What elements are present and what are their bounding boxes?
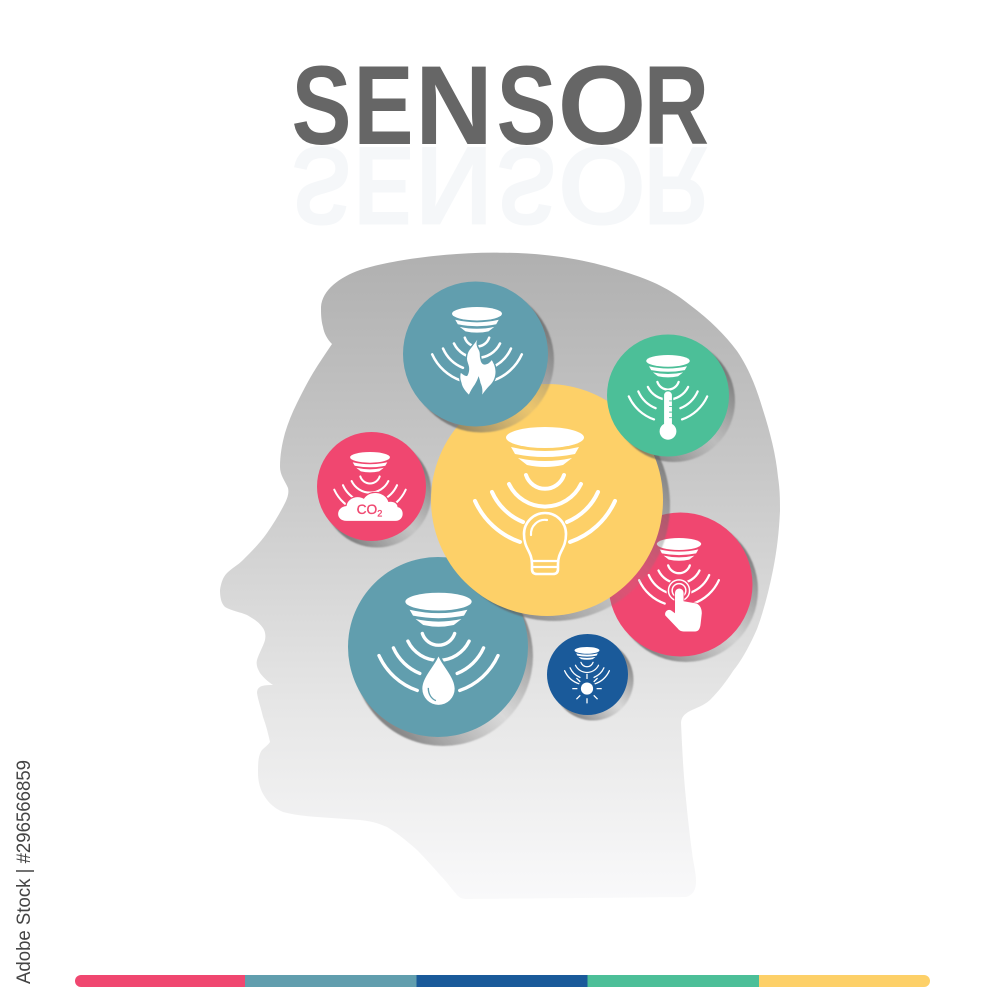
title reflection: S — [496, 123, 556, 248]
title: N — [415, 43, 493, 168]
icon: fire sensor — [432, 307, 522, 395]
icon: thermometer sensor — [629, 355, 707, 440]
circle: sun sensor — [547, 634, 634, 720]
circle: CO2 sensor — [317, 432, 432, 548]
title: R — [644, 43, 709, 168]
bottom colour bar — [75, 975, 930, 987]
side stock id label: Adobe Stock | #296566859 — [14, 760, 35, 984]
title reflection: S — [292, 123, 352, 248]
title reflection: O — [558, 123, 646, 248]
title: O — [558, 43, 646, 168]
icon: water drop sensor — [379, 593, 498, 705]
title reflection: N — [415, 123, 493, 248]
title: S — [292, 43, 352, 168]
head silhouette — [220, 253, 780, 899]
icon: sun sensor — [565, 647, 609, 703]
icon: CO2 sensor: 2 — [377, 508, 382, 518]
title reflection: R — [644, 123, 709, 248]
title — [292, 43, 709, 168]
icon: CO2 sensor: CO — [357, 502, 377, 517]
title: E — [354, 43, 414, 168]
circle: fire sensor — [403, 282, 554, 432]
circle: temperature sensor — [607, 334, 735, 462]
icon: CO2 sensor — [334, 452, 406, 521]
icon: touch sensor — [639, 538, 719, 631]
title reflection — [292, 123, 709, 248]
title: S — [496, 43, 556, 168]
circle: light sensor, large — [431, 384, 670, 621]
circle: water sensor — [348, 557, 533, 746]
icon: bulb sensor — [475, 427, 615, 574]
title reflection: E — [354, 123, 414, 248]
circle: touch sensor — [608, 512, 758, 662]
